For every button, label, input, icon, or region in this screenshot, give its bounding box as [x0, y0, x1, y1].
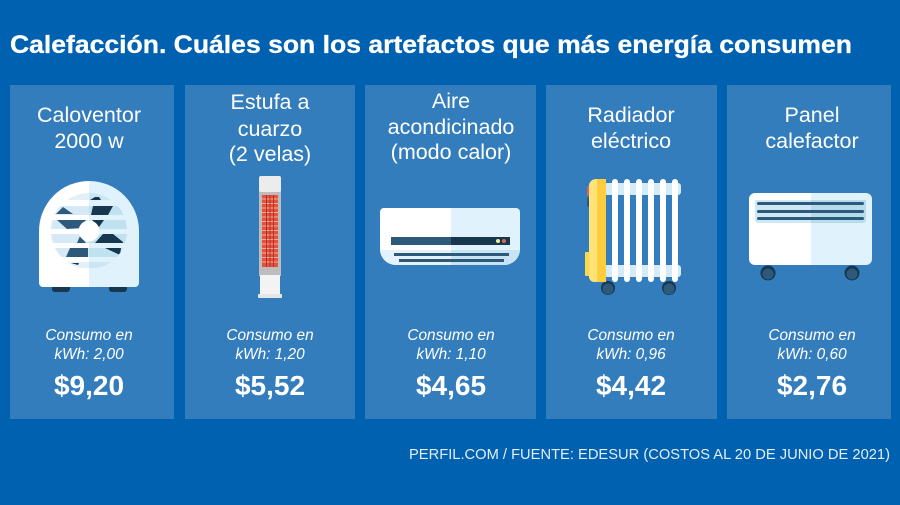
heading: panel	[765, 103, 859, 153]
icon: air conditioner	[380, 208, 520, 265]
icon: panel heater	[749, 193, 872, 280]
icon: quartz heater	[258, 176, 282, 298]
heading: panel: calefactor	[765, 129, 859, 153]
consumption: caloventor: kWh: 2,00	[54, 346, 124, 363]
consumption: aire: Consumo en	[407, 327, 495, 344]
panel: panel calefactor	[727, 85, 891, 419]
consumption: estufa	[226, 327, 314, 363]
heading: aire: acondicinado	[388, 115, 514, 139]
consumption: estufa: Consumo en	[226, 327, 314, 344]
heading: caloventor	[37, 103, 141, 153]
consumption: radiador: Consumo en	[587, 327, 675, 344]
heading: estufa: Estufa a	[231, 90, 309, 114]
heading: caloventor: 2000 w	[54, 129, 124, 153]
heading: radiador	[587, 103, 675, 153]
price: estufa: $5,52	[235, 370, 305, 401]
icon: oil radiator	[585, 179, 681, 295]
heading: estufa	[229, 90, 311, 166]
panel: estufa a cuarzo	[185, 85, 355, 419]
heading: radiador: Radiador	[587, 103, 675, 127]
consumption: panel: Consumo en	[768, 327, 856, 344]
consumption: radiador: kWh: 0,96	[596, 346, 666, 363]
panel: caloventor	[10, 85, 174, 419]
heading: aire: Aire	[432, 89, 470, 113]
consumption: caloventor	[45, 327, 133, 363]
heading: caloventor: Caloventor	[37, 103, 141, 127]
price: caloventor: $9,20	[54, 370, 124, 401]
consumption: caloventor: Consumo en	[45, 327, 133, 344]
heading: radiador: eléctrico	[591, 129, 671, 153]
title: Calefacción. Cuáles son los artefactos que más energía consumen	[10, 31, 852, 59]
heading: estufa: cuarzo	[238, 117, 302, 141]
icon: fan heater	[39, 181, 139, 292]
consumption: estufa: kWh: 1,20	[235, 346, 305, 363]
consumption: panel	[768, 327, 856, 363]
panel: radiador	[546, 85, 717, 419]
heading: panel: Panel	[784, 103, 840, 127]
consumption: radiador	[587, 327, 675, 363]
price: aire: $4,65	[416, 370, 486, 401]
consumption: aire	[407, 327, 495, 363]
price: radiador: $4,42	[596, 370, 666, 401]
price: panel: $2,76	[777, 370, 847, 401]
source note: PERFIL.COM / FUENTE: EDESUR (COSTOS AL 20 DE JUNIO DE 2021)	[409, 447, 890, 463]
consumption: aire: kWh: 1,10	[416, 346, 486, 363]
heading: aire: (modo calor)	[391, 140, 511, 164]
consumption: panel: kWh: 0,60	[777, 346, 847, 363]
heading: aire	[388, 89, 514, 164]
heading: estufa: (2 velas)	[229, 142, 311, 166]
panel: aire acondicionado	[365, 85, 536, 419]
